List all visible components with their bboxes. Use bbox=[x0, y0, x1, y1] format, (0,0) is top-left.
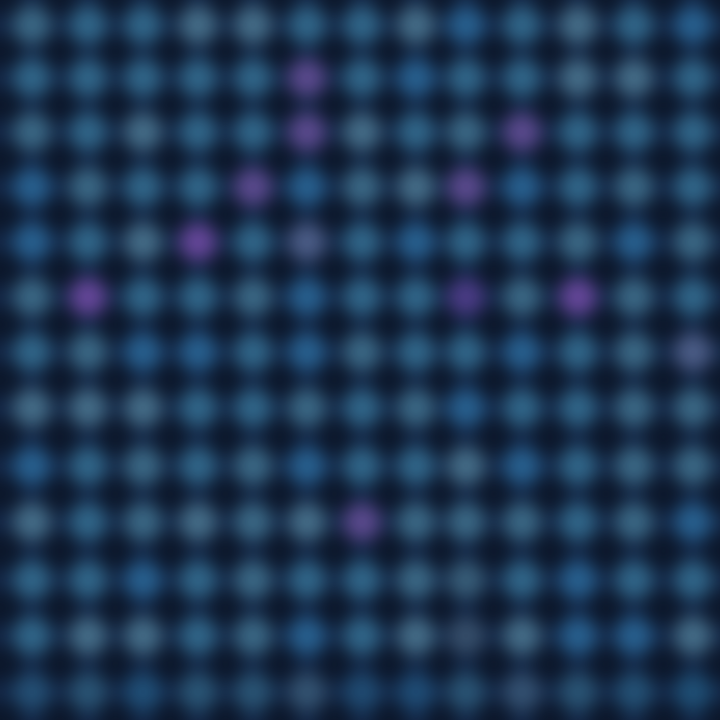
row 6 bbox=[13, 278, 712, 316]
row 7 bbox=[13, 333, 712, 371]
row 4 bbox=[13, 168, 712, 206]
row 9 bbox=[13, 447, 712, 485]
row 12 bbox=[13, 617, 712, 655]
row 8 bbox=[13, 389, 712, 427]
row 3 bbox=[13, 113, 712, 151]
row 2 bbox=[13, 59, 712, 97]
row 13 bbox=[13, 673, 712, 711]
row 10 bbox=[13, 503, 712, 541]
row 11 bbox=[13, 561, 712, 599]
row 1 bbox=[13, 6, 712, 44]
row 5 bbox=[13, 223, 712, 261]
